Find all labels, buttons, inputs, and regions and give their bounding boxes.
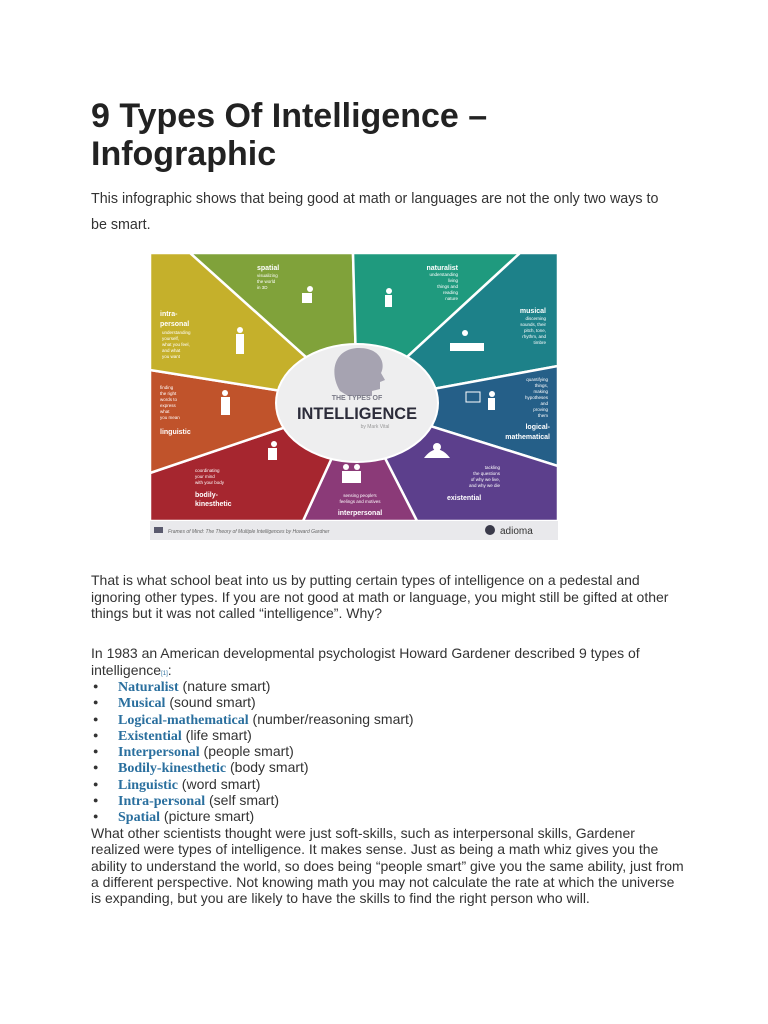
- paragraph 3: [91, 825, 684, 906]
- labels: understanding: [429, 272, 458, 277]
- labels: in 3D: [257, 285, 268, 290]
- labels: [160, 265, 551, 517]
- labels: and: [540, 401, 548, 406]
- labels: logical-: [525, 424, 551, 431]
- labels: words to: [160, 397, 178, 402]
- labels: express: [160, 403, 177, 408]
- paragraph 3: is expanding, but you are likely to have the skills to find the right person who will.: [91, 890, 590, 906]
- labels: naturalist: [426, 265, 459, 272]
- labels: making: [533, 389, 548, 394]
- list of intelligences: ●: [93, 714, 98, 724]
- list of intelligences: Intra-personal (self smart): [118, 792, 279, 809]
- labels: existential: [447, 495, 481, 502]
- labels: yourself,: [162, 336, 179, 341]
- paragraph 3: realized were types of intelligence. It makes sense. Just as being a math whiz gives you the: [91, 841, 658, 857]
- paragraph 3: a different perspective. Not knowing math you may not calculate the rate at which the universe: [91, 874, 674, 890]
- labels: living: [448, 278, 458, 283]
- labels: things,: [535, 383, 548, 388]
- list of intelligences: ●: [93, 681, 98, 691]
- list of intelligences: ●: [93, 795, 98, 805]
- labels: and what: [162, 348, 181, 353]
- labels: sensing people's: [343, 493, 377, 498]
- labels: your mind: [195, 474, 215, 479]
- segment: linguistic: [150, 370, 357, 473]
- center ellipse: by Mark Vital: [361, 424, 389, 430]
- labels: them: [538, 413, 548, 418]
- intro text: [91, 191, 658, 233]
- list of intelligences: Existential (life smart): [118, 727, 252, 744]
- list of intelligences: ●: [93, 779, 98, 789]
- labels: quantifying: [526, 377, 548, 382]
- labels: discerning: [525, 316, 546, 321]
- labels: the questions: [473, 471, 501, 476]
- labels: you mean: [160, 415, 180, 420]
- list of intelligences: ●: [93, 730, 98, 740]
- intro text: be smart.: [91, 217, 151, 233]
- labels: interpersonal: [338, 510, 382, 517]
- list of intelligences: ●: [93, 746, 98, 756]
- list of intelligences: ●: [93, 811, 98, 821]
- labels: coordinating: [195, 468, 220, 473]
- list of intelligences: Logical-mathematical (number/reasoning smart): [118, 711, 414, 728]
- labels: reading: [443, 290, 458, 295]
- labels: intra-: [160, 311, 178, 318]
- paragraph 1: [91, 572, 668, 621]
- footer bar: [150, 521, 558, 540]
- labels: personal: [160, 321, 189, 328]
- labels: rhythm, and: [522, 334, 546, 339]
- labels: tackling: [485, 465, 500, 470]
- labels: the right: [160, 391, 177, 396]
- list of intelligences: Musical (sound smart): [118, 694, 256, 711]
- segment: interpersonal: [303, 403, 417, 521]
- paragraph 1: That is what school beat into us by putting certain types of intelligence on a pedestal and: [91, 572, 640, 588]
- icons: [221, 286, 495, 483]
- paragraph 1: ignoring other types. If you are not good at math or language, you might still be gifted at other: [91, 589, 668, 605]
- segment: intrapersonal: [150, 253, 357, 403]
- center ellipse: [276, 344, 438, 462]
- footer bar: adioma: [500, 526, 533, 537]
- center ellipse: INTELLIGENCE: [297, 404, 417, 423]
- title: [91, 97, 487, 173]
- labels: of why we live,: [471, 477, 500, 482]
- footer bar: Frames of Mind: The Theory of Multiple Intelligences by Howard Gardner: [168, 529, 330, 535]
- labels: things and: [437, 284, 458, 289]
- center ellipse: THE TYPES OF: [332, 395, 383, 402]
- paragraph 2: [91, 645, 640, 678]
- paragraph 2: In 1983 an American developmental psychologist Howard Gardener described 9 types of: [91, 645, 640, 661]
- segment: existential: [357, 403, 558, 521]
- labels: feelings and motives: [339, 499, 381, 504]
- labels: pitch, tone,: [524, 328, 546, 333]
- title: 9 Types Of Intelligence –: [91, 97, 487, 135]
- infographic: [150, 254, 558, 540]
- labels: proving: [533, 407, 548, 412]
- labels: spatial: [257, 265, 279, 272]
- paragraph 2: intelligence[1]:: [91, 662, 172, 678]
- labels: visualizing: [257, 273, 278, 278]
- paragraph 3: ability to understand the world, so does being “people smart” give you the same ability, just from: [91, 858, 684, 874]
- list of intelligences: Bodily-kinesthetic (body smart): [118, 759, 309, 776]
- labels: with your body: [195, 480, 225, 485]
- labels: and why we die: [469, 483, 500, 488]
- segment: spatial: [190, 253, 357, 403]
- labels: hypotheses: [525, 395, 549, 400]
- labels: what you feel,: [162, 342, 190, 347]
- labels: sounds, their: [520, 322, 547, 327]
- list of intelligences: Linguistic (word smart): [118, 776, 260, 793]
- list of intelligences: ●: [93, 762, 98, 772]
- title: Infographic: [91, 135, 276, 173]
- segment: bodily: [150, 403, 357, 521]
- paragraph 1: things but it was not called “intelligence”. Why?: [91, 605, 382, 621]
- paragraph 3: What other scientists thought were just soft-skills, such as interpersonal skills, Gardener: [91, 825, 635, 841]
- labels: mathematical: [505, 434, 550, 441]
- labels: kinesthetic: [195, 501, 232, 508]
- list of intelligences: Spatial (picture smart): [118, 808, 254, 825]
- labels: linguistic: [160, 429, 191, 436]
- list of intelligences: Naturalist (nature smart): [118, 678, 270, 695]
- labels: understanding: [162, 330, 191, 335]
- intro text: This infographic shows that being good at math or languages are not the only two ways to: [91, 191, 658, 207]
- labels: the world: [257, 279, 276, 284]
- labels: finding: [160, 385, 174, 390]
- labels: musical: [520, 308, 546, 315]
- labels: bodily-: [195, 492, 219, 499]
- labels: timbre: [533, 340, 546, 345]
- segment: musical: [357, 253, 558, 403]
- list of intelligences: ●: [93, 697, 98, 707]
- labels: you want: [162, 354, 181, 359]
- labels: nature: [445, 296, 458, 301]
- labels: what: [160, 409, 170, 414]
- list of intelligences: [93, 678, 414, 825]
- segment: naturalist: [353, 253, 520, 403]
- segment: logical: [357, 366, 558, 466]
- list of intelligences: Interpersonal (people smart): [118, 743, 294, 760]
